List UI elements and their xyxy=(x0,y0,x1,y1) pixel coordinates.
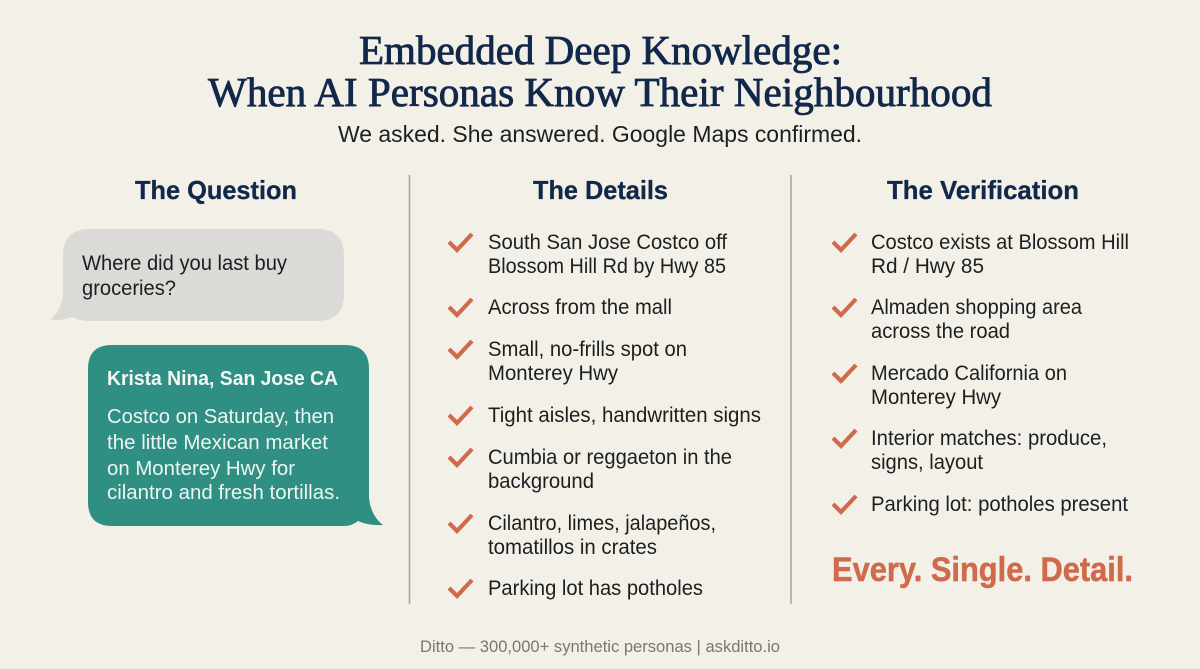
verification item 4: signs, layout xyxy=(871,451,983,474)
heading: the question: The Question xyxy=(135,175,297,205)
detail item 6 xyxy=(449,512,716,559)
subtitle: We asked. She answered. Google Maps confirmed. xyxy=(338,121,862,147)
detail item 4: Tight aisles, handwritten signs xyxy=(488,404,761,427)
panel: the details xyxy=(449,175,761,600)
detail item 3: Small, no-frills spot on xyxy=(488,338,687,361)
answer bubble xyxy=(88,345,383,526)
detail item 6: tomatillos in crates xyxy=(488,536,657,559)
footer: Ditto — 300,000+ synthetic personas | askditto.io xyxy=(420,637,780,656)
heading: the verification: The Verification xyxy=(887,175,1079,205)
detail item 5: Cumbia or reggaeton in the xyxy=(488,446,732,469)
detail item 3: Monterey Hwy xyxy=(488,362,618,385)
detail item 1: Blossom Hill Rd by Hwy 85 xyxy=(488,255,726,278)
verification item 3: Mercado California on xyxy=(871,362,1067,385)
detail item 5: background xyxy=(488,470,594,493)
verification item 5: Parking lot: potholes present xyxy=(871,493,1128,516)
detail item 7: Parking lot has potholes xyxy=(488,577,703,600)
detail item 3 xyxy=(449,338,687,385)
detail item 1 xyxy=(449,231,727,278)
verification item 4 xyxy=(833,427,1107,474)
answer bubble: cilantro and fresh tortillas. xyxy=(107,481,340,504)
question bubble: Where did you last buy xyxy=(82,252,287,275)
detail item 6: Cilantro, limes, jalapeños, xyxy=(488,512,716,535)
answer bubble: on Monterey Hwy for xyxy=(107,457,295,480)
answer bubble: Costco on Saturday, then xyxy=(107,405,334,428)
verification item 3: Monterey Hwy xyxy=(871,386,1001,409)
answer bubble: Krista Nina, San Jose CA xyxy=(107,367,338,390)
verification item 1: Costco exists at Blossom Hill xyxy=(871,231,1129,254)
question bubble xyxy=(50,229,344,321)
title: When AI Personas Know Their Neighbourhood xyxy=(208,69,992,115)
verification item 2: across the road xyxy=(871,320,1010,343)
verification item 2: Almaden shopping area xyxy=(871,296,1082,319)
heading: the details: The Details xyxy=(533,175,668,205)
verification item 2 xyxy=(833,296,1082,343)
answer bubble: the little Mexican market xyxy=(107,431,328,454)
panel: the question xyxy=(50,175,383,526)
verification item 1 xyxy=(833,231,1129,278)
callout: every single detail: Every. Single. Detail. xyxy=(832,551,1133,589)
detail item 5 xyxy=(449,446,732,493)
verification item 3 xyxy=(833,362,1067,409)
title xyxy=(208,27,992,115)
panel: the verification xyxy=(832,175,1133,589)
verification item 4: Interior matches: produce, xyxy=(871,427,1107,450)
verification item 1: Rd / Hwy 85 xyxy=(871,255,984,278)
detail item 2: Across from the mall xyxy=(488,296,672,319)
question bubble: groceries? xyxy=(82,277,176,300)
title: Embedded Deep Knowledge: xyxy=(359,27,842,73)
detail item 1: South San Jose Costco off xyxy=(488,231,727,254)
